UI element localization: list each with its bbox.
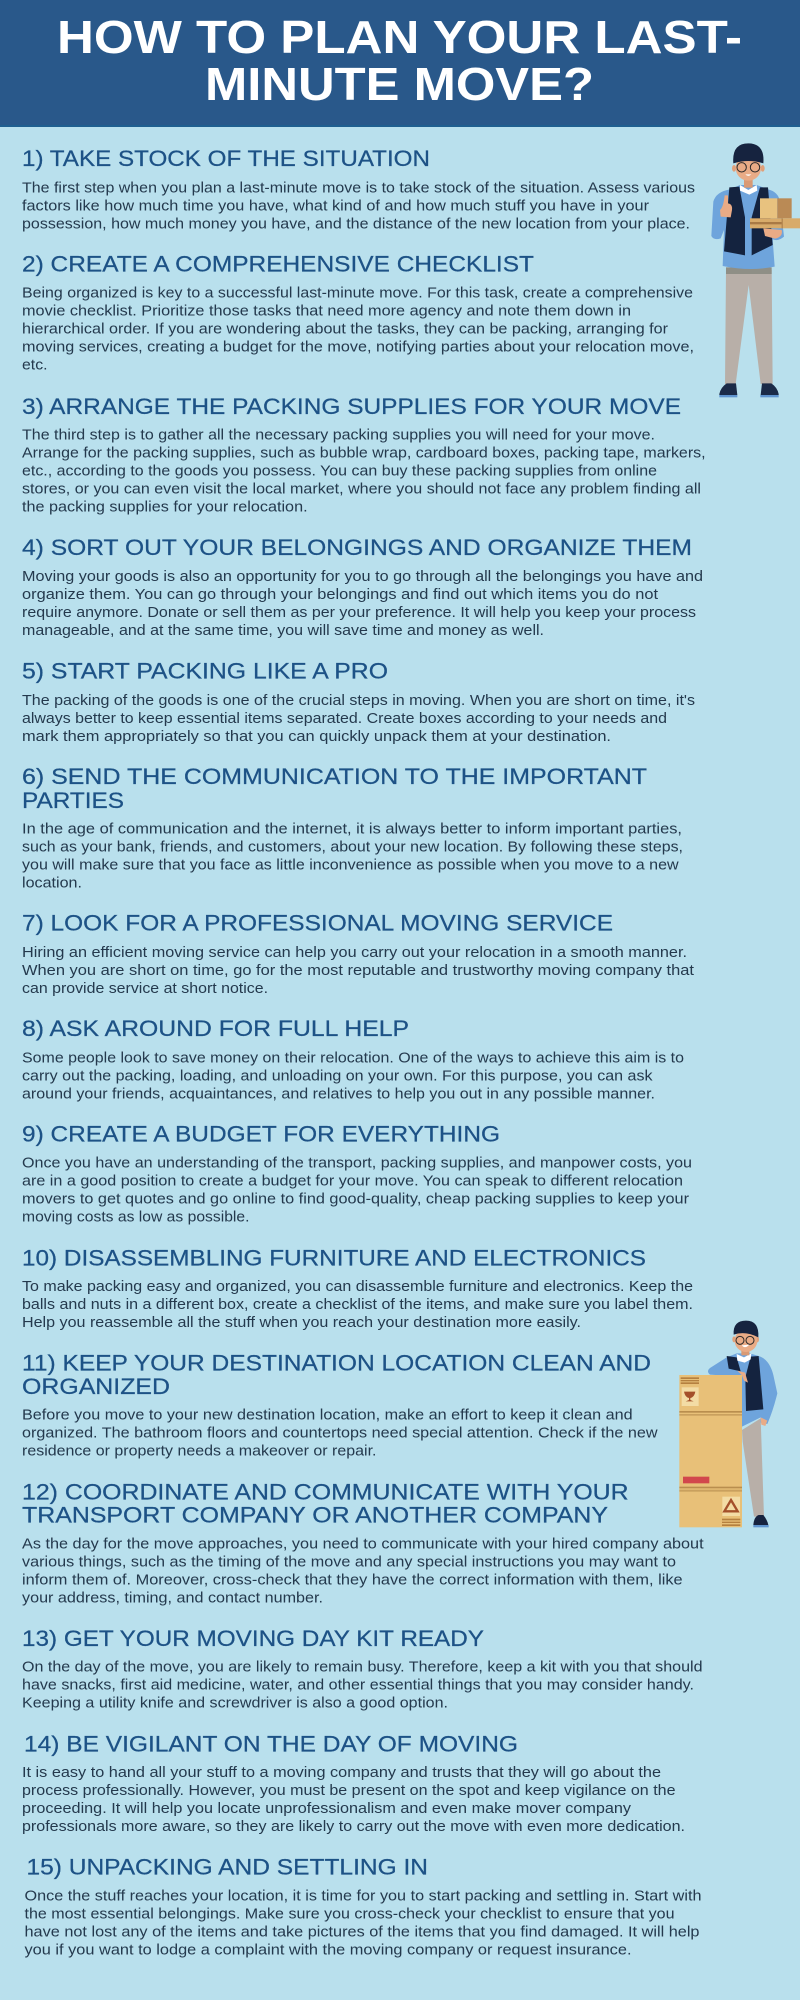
body text 10: Help you reassemble all the stuff when you reach your destination more easily. [22, 1315, 581, 1331]
heading 4: 4) SORT OUT YOUR BELONGINGS AND ORGANIZE THEM [22, 535, 692, 560]
heading 1: 1) TAKE STOCK OF THE SITUATION [22, 146, 430, 171]
heading 2: 2) CREATE A COMPREHENSIVE CHECKLIST [22, 252, 534, 277]
body text 12 [22, 1536, 704, 1606]
section 9: budget [22, 1121, 692, 1226]
section 11: destination clean [22, 1351, 658, 1460]
title banner [0, 0, 800, 127]
heading 13: 13) GET YOUR MOVING DAY KIT READY [22, 1626, 484, 1651]
heading 6 [22, 764, 647, 813]
body text 15: the most essential belongings. Make sure you cross-check your checklist to ensure that you [24, 1906, 674, 1922]
body text 2: hierarchical order. If you are wondering about the tasks, they can be packing, arranging for [22, 322, 668, 338]
heading 6: 6) SEND THE COMMUNICATION TO THE IMPORTANT [22, 764, 647, 789]
body text 3: etc., according to the goods you possess. You can buy these packing supplies from online [22, 463, 657, 479]
body text 8: Some people look to save money on their relocation. One of the ways to achieve this aim is to [22, 1050, 684, 1066]
heading 10: 10) DISASSEMBLING FURNITURE AND ELECTRONICS [22, 1245, 646, 1270]
body text 9: moving costs as low as possible. [22, 1210, 250, 1226]
illustration: mover leaning on large box [679, 1321, 777, 1527]
body text 15 [24, 1888, 702, 1958]
body text 13 [22, 1660, 703, 1712]
body text 8 [22, 1050, 684, 1102]
body text 14: professionals more aware, so they are likely to carry out the move with even more dedication. [22, 1819, 685, 1835]
body text 8: carry out the packing, loading, and unloading on your own. For this purpose, you can ask [22, 1068, 653, 1084]
title: HOW TO PLAN YOUR LAST- [57, 11, 742, 63]
body text 14: proceeding. It will help you locate unprofessionalism and even make mover company [22, 1801, 632, 1817]
heading 7: 7) LOOK FOR A PROFESSIONAL MOVING SERVICE [22, 911, 613, 936]
body text 2: Being organized is key to a successful last-minute move. For this task, create a comprehensive [22, 286, 693, 302]
body text 9: Once you have an understanding of the transport, packing supplies, and manpower costs, you [22, 1156, 692, 1172]
body text 7: can provide service at short notice. [22, 981, 268, 997]
section 6: send communication [22, 764, 683, 892]
body text 13: have snacks, first aid medicine, water, and other essential things that you may consider handy. [22, 1678, 694, 1694]
body text 8: around your friends, acquaintances, and relatives to help you out in any possible manner. [22, 1086, 655, 1102]
body text 10: balls and nuts in a different box, create a checklist of the items, and make sure you label them. [22, 1297, 693, 1313]
section 12: coordinate [22, 1479, 704, 1606]
section 10: disassembling [22, 1245, 693, 1331]
body text 9: are in a good position to create a budget for your move. You can speak to different relocation [22, 1174, 683, 1190]
body text 5: always better to keep essential items separated. Create boxes according to your needs and [22, 711, 667, 727]
body text 15: you if you want to lodge a complaint with the moving company or request insurance. [24, 1942, 632, 1958]
body text 7: Hiring an efficient moving service can help you carry out your relocation in a smooth manner. [22, 945, 687, 961]
body text 4: manageable, and at the same time, you will save time and money as well. [22, 623, 544, 639]
illustration: mover holding boxes [711, 143, 800, 397]
heading 11: ORGANIZED [22, 1374, 170, 1399]
body text 6 [22, 822, 683, 892]
heading 3: 3) ARRANGE THE PACKING SUPPLIES FOR YOUR MOVE [22, 394, 681, 419]
heading 6: PARTIES [22, 788, 124, 813]
section 4: sort belongings [22, 535, 703, 639]
body text 2 [22, 286, 694, 374]
body text 4: Moving your goods is also an opportunity for you to go through all the belongings you have and [22, 569, 703, 585]
body text 2: etc. [22, 358, 48, 374]
heading 12: 12) COORDINATE AND COMMUNICATE WITH YOUR [22, 1479, 629, 1504]
section 7: professional service [22, 911, 694, 997]
body text 11: residence or property needs a makeover or repair. [22, 1444, 376, 1460]
body text 14: It is easy to hand all your stuff to a moving company and trusts that they will go about the [22, 1765, 661, 1781]
heading 12: TRANSPORT COMPANY OR ANOTHER COMPANY [22, 1503, 608, 1528]
section 8: ask for help [22, 1016, 684, 1102]
body text 12: As the day for the move approaches, you need to communicate with your hired company about [22, 1536, 704, 1552]
body text 11 [22, 1408, 658, 1460]
section 1: take stock [22, 146, 695, 233]
body text 9: movers to get quotes and go online to find good-quality, cheap packing supplies to keep your [22, 1192, 689, 1208]
title: MINUTE MOVE? [205, 58, 594, 110]
body text 11: organized. The bathroom floors and countertops need special attention. Check if the new [22, 1426, 658, 1442]
body text 6: you will make sure that you face as little inconvenience as possible when you move to a new [22, 858, 679, 874]
body text 10: To make packing easy and organized, you can disassemble furniture and electronics. Keep the [22, 1279, 693, 1295]
section 3: packing supplies [22, 394, 706, 515]
body text 12: your address, timing, and contact number. [22, 1590, 323, 1606]
section 13: moving day kit [22, 1626, 703, 1712]
body text 3: Arrange for the packing supplies, such as bubble wrap, cardboard boxes, packing tape, markers, [22, 445, 706, 461]
section 2: checklist [22, 252, 694, 374]
body text 13: Keeping a utility knife and screwdriver is also a good option. [22, 1696, 448, 1712]
body text 1: The first step when you plan a last-minute move is to take stock of the situation. Assess various [22, 181, 695, 197]
body text 6: such as your bank, friends, and customers, about your new location. By following these steps, [22, 840, 683, 856]
body text 4: organize them. You can go through your belongings and find out which items you do not [22, 587, 658, 603]
heading 12 [22, 1479, 629, 1528]
body text 3: stores, or you can even visit the local market, where you should not face any problem finding all [22, 481, 701, 497]
body text 4 [22, 569, 703, 639]
heading 11: 11) KEEP YOUR DESTINATION LOCATION CLEAN AND [22, 1351, 651, 1376]
section 14: be vigilant [22, 1731, 685, 1835]
body text 5: The packing of the goods is one of the crucial steps in moving. When you are short on time, it's [22, 693, 695, 709]
body text 14: process professionally. However, you must be present on the spot and keep vigilance on the [22, 1783, 676, 1799]
title [57, 11, 742, 110]
heading 11 [22, 1351, 651, 1399]
body text 12: inform them of. Moreover, cross-check that they have the correct information with them, like [22, 1572, 683, 1588]
body text 13: On the day of the move, you are likely to remain busy. Therefore, keep a kit with you that should [22, 1660, 703, 1676]
heading 5: 5) START PACKING LIKE A PRO [22, 659, 388, 684]
body text 7: When you are short on time, go for the most reputable and trustworthy moving company that [22, 963, 694, 979]
section 15: unpacking [24, 1855, 702, 1958]
body text 3 [22, 427, 706, 515]
body text 11: Before you move to your new destination location, make an effort to keep it clean and [22, 1408, 633, 1424]
body text 1: possession, how much money you have, and the distance of the new location from your place. [22, 217, 690, 233]
body text 4: require anymore. Donate or sell them as per your preference. It will help you keep your process [22, 605, 696, 621]
body text 5: mark them appropriately so that you can quickly unpack them at your destination. [22, 729, 611, 745]
body text 1: factors like how much time you have, what kind of and how much stuff you have in your [22, 199, 649, 215]
body text 6: In the age of communication and the internet, it is always better to inform important parties, [22, 822, 682, 838]
body text 6: location. [22, 876, 82, 892]
body text 14 [22, 1765, 685, 1835]
body text 15: Once the stuff reaches your location, it is time for you to start packing and settling in. Start with [24, 1888, 702, 1904]
body text 9 [22, 1156, 692, 1226]
body text 3: the packing supplies for your relocation. [22, 499, 308, 515]
heading 8: 8) ASK AROUND FOR FULL HELP [22, 1016, 409, 1041]
body text 7 [22, 945, 694, 997]
body text 1 [22, 181, 695, 233]
body text 5 [22, 693, 695, 745]
section 5: start packing [22, 659, 695, 745]
body text 15: have not lost any of the items and take pictures of the items that you find damaged. It will help [24, 1924, 700, 1940]
heading 9: 9) CREATE A BUDGET FOR EVERYTHING [22, 1121, 500, 1146]
heading 15: 15) UNPACKING AND SETTLING IN [26, 1855, 428, 1880]
body text 3: The third step is to gather all the necessary packing supplies you will need for your move. [22, 427, 655, 443]
body text 10 [22, 1279, 693, 1331]
heading 14: 14) BE VIGILANT ON THE DAY OF MOVING [24, 1731, 518, 1756]
body text 2: moving services, creating a budget for the move, notifying parties about your relocation move, [22, 340, 694, 356]
body text 2: movie checklist. Prioritize those tasks that need more agency and note them down in [22, 304, 631, 320]
body text 12: various things, such as the timing of the move and any special instructions you may want to [22, 1554, 676, 1570]
